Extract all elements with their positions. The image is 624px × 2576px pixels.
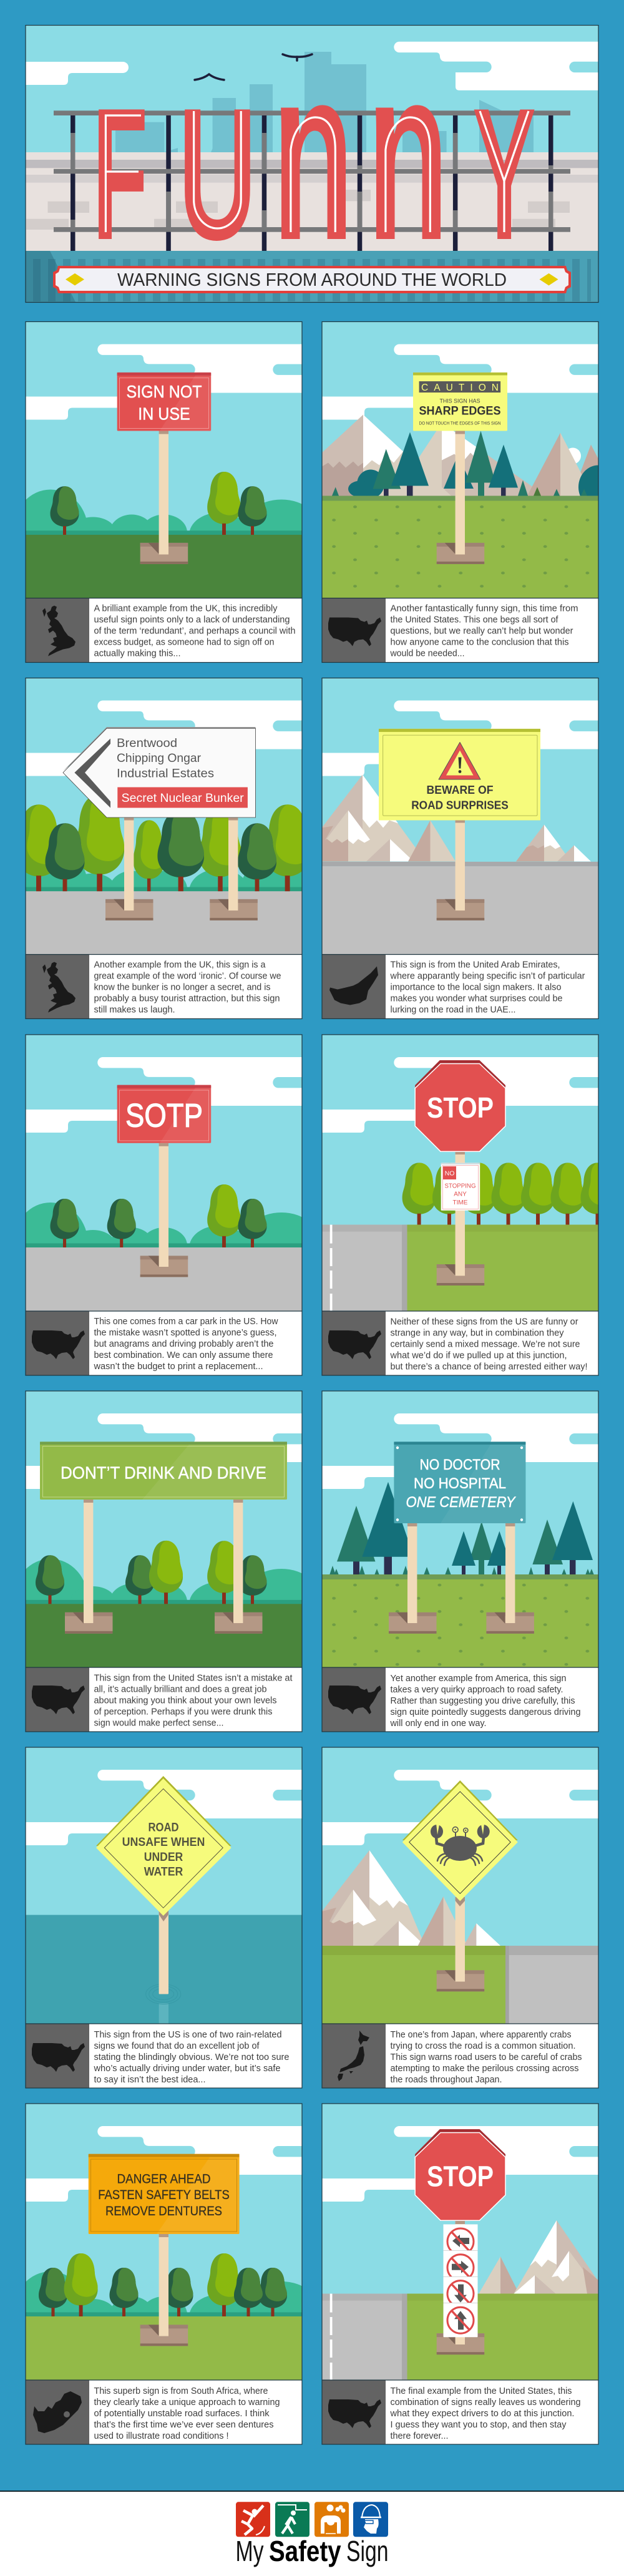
scene: [322, 2104, 599, 2381]
country box: UAE: [322, 955, 386, 1018]
caption text: what they expect drivers to do at this junction.: [389, 2409, 575, 2419]
sign: caution sharp edges: SHARP EDGES: [419, 404, 500, 418]
header frame: [26, 25, 598, 302]
header clouds: [26, 42, 598, 90]
hills: [26, 489, 302, 530]
caption text: [89, 598, 302, 663]
sign post and base: [437, 1151, 484, 1286]
caption text: would be needed...: [390, 649, 464, 659]
caption: [26, 2024, 302, 2088]
no straight ahead: [443, 2303, 478, 2338]
mountains: [296, 775, 591, 861]
header panel: [26, 14, 598, 302]
title: FUNNY neon letters: n: [272, 14, 354, 292]
caption text: probably a busy tourist attraction, but this sign: [94, 993, 280, 1003]
sign: road unsafe when under water: UNSAFE WHEN: [122, 1836, 205, 1849]
caption text: Rather than suggesting you drive carefully, this: [391, 1696, 575, 1706]
sky: [322, 678, 598, 866]
sign: caution sharp edges: THIS SIGN HAS: [439, 398, 480, 404]
country box: USA: [26, 1667, 89, 1732]
sky: [26, 1391, 302, 1667]
footer: [0, 2491, 624, 2576]
sign: SOTP: SOTP: [125, 1098, 203, 1134]
row of trees: [402, 1163, 614, 1225]
sign: no doctor: NO DOCTOR: [419, 1456, 500, 1473]
caption text: [89, 2024, 302, 2088]
subtitle banner: WARNING SIGNS FROM AROUND THE WORLD: [117, 270, 507, 290]
scene: [322, 1035, 614, 1312]
panel: danger ahead remove dentures: [13, 2104, 323, 2444]
no stopping sign: [441, 1163, 480, 1211]
caption text: [89, 955, 302, 1018]
sign: directional arrow: Industrial Estates: [117, 768, 214, 780]
sign: road unsafe when under water: WATER: [144, 1866, 183, 1879]
sky: [26, 1747, 302, 2024]
sign: danger ahead: FASTEN SAFETY BELTS: [98, 2188, 230, 2202]
sign: beware of road surprises: ROAD SURPRISES: [411, 799, 509, 811]
clouds: [26, 344, 302, 419]
stack of prohibition signs: [443, 2224, 478, 2337]
sign post: [159, 1911, 168, 1994]
country box: USA: [26, 2024, 89, 2088]
lower teal band: [26, 251, 598, 302]
caption text: about making you think about your own levels: [94, 1696, 277, 1706]
road and grass: [322, 2294, 599, 2381]
caption text: The final example from the United States, this: [391, 2386, 572, 2396]
caption text: useful sign points only to a lack of understanding: [94, 615, 290, 625]
caption text: atempting to make the perilous crossing across: [391, 2064, 579, 2074]
sign: dont't drink and drive: [40, 1442, 287, 1500]
panel: stop with no turns: [322, 2104, 599, 2444]
hills: [13, 1559, 323, 1641]
caption: [26, 1667, 302, 1732]
mountains: [322, 414, 598, 495]
icon: walking person under pipe: [275, 2502, 310, 2537]
sign post and base: [140, 1143, 188, 1277]
ground: [26, 530, 302, 598]
ground: [26, 1600, 302, 1667]
sign: directional arrow: Chipping Ongar: [117, 752, 202, 765]
road and grass: [322, 1225, 599, 1312]
sign: no doctor: ONE CEMETERY: [406, 1494, 516, 1511]
sky: [26, 1035, 302, 1311]
clouds: [26, 1413, 302, 1489]
title: FUNNY neon letters: F: [92, 70, 148, 280]
no straight down: [443, 2276, 478, 2303]
hills: [26, 869, 302, 887]
road: [26, 887, 302, 955]
hills: [13, 2271, 323, 2354]
caption text: [386, 1311, 598, 1375]
panel: road unsafe when under water: [26, 1747, 302, 2088]
sign: SIGN NOT IN USE: IN USE: [138, 404, 190, 423]
panel: secret nuclear bunker: [13, 678, 323, 1018]
clouds: [322, 1770, 598, 1845]
caption text: Another fantastically funny sign, this time from: [391, 604, 578, 614]
logo wordmark: My: [236, 2535, 263, 2567]
logo wordmark: [236, 2535, 388, 2567]
caption text: This sign from the United States isn’t a mistake at: [94, 1674, 292, 1684]
country box: USA: [322, 1667, 386, 1732]
no stopping sign: TIME: [453, 1199, 468, 1206]
sign: directional arrow: [63, 727, 256, 817]
sky: [322, 1747, 598, 2024]
logo wordmark: Safety: [269, 2535, 341, 2567]
caption text: Yet another example from America, this sign: [391, 1674, 567, 1684]
title: FUNNY neon letters: Y: [472, 68, 536, 279]
sky: [322, 322, 598, 487]
sign: no doctor: [394, 1442, 525, 1523]
sign: dont't drink and drive: DONT’T DRINK AND DRIVE: [61, 1463, 266, 1482]
sign posts and bases: [65, 1500, 262, 1634]
sign: SIGN NOT IN USE: [117, 373, 211, 431]
caption text: This sign from the US is one of two rain-related: [94, 2030, 282, 2040]
icon: slipping person: [236, 2502, 270, 2537]
scene: [322, 322, 598, 598]
road: [26, 1243, 302, 1311]
caption text: strange in any way, but in combination they: [391, 1328, 564, 1338]
no stopping sign: NO: [445, 1169, 454, 1177]
caption text: of the term ‘redundant’, and perhaps a council with: [94, 627, 296, 637]
clouds: [26, 700, 302, 776]
caption text: [386, 598, 598, 663]
panel: beware of road surprises: [296, 678, 598, 1018]
caption text: of perception. Perhaps if you were drunk this: [94, 1707, 272, 1717]
panel: stop and no stopping: [322, 1035, 614, 1375]
sign: no doctor: NO HOSPITAL: [414, 1475, 506, 1492]
scene: [26, 1747, 302, 2024]
sky: [26, 678, 302, 887]
panel: dont't drink and drive: [13, 1391, 323, 1732]
scene: [295, 1747, 598, 2024]
sign: directional arrow: Secret Nuclear Bunker: [122, 792, 244, 805]
scene: [322, 1391, 598, 1667]
stop sign: STOP: [427, 1091, 494, 1124]
sky: [26, 322, 302, 530]
trees: [36, 1541, 267, 1604]
caption text: they clearly take a unique approach to warning: [94, 2398, 280, 2408]
clouds: [26, 1770, 302, 1845]
caption text: to say it isn’t the best idea...: [94, 2075, 206, 2085]
no right turn: [443, 2250, 478, 2276]
caption text: what we’d do if we pulled up at this junction,: [389, 1350, 567, 1360]
caption: [322, 955, 598, 1018]
no stopping sign: STOPPING: [444, 1183, 476, 1189]
sign: beware of road surprises: BEWARE OF: [427, 784, 493, 796]
caption text: but anagrams and driving probably aren’t the: [94, 1339, 273, 1349]
country box: South Africa: [26, 2380, 89, 2444]
grass and road: [322, 1946, 598, 2024]
caption text: [89, 1311, 302, 1375]
scene: [13, 1391, 323, 1667]
caption: [322, 1667, 598, 1732]
birds: [195, 54, 312, 80]
no stopping sign: ANY: [454, 1191, 467, 1198]
caption text: makes you wonder what surprises could be: [391, 993, 563, 1003]
caption: [322, 1311, 598, 1375]
caption: [322, 2380, 598, 2444]
clouds: [26, 2126, 302, 2202]
caption text: takes a very quirky approach to road safety.: [391, 1685, 563, 1695]
sign post and base: [140, 431, 188, 564]
country box: USA: [26, 1311, 89, 1375]
stop sign: [415, 1060, 505, 1151]
logo wordmark: Sign: [346, 2535, 388, 2567]
scene: [26, 678, 302, 954]
caption text: signs we found that do an excellent job of: [94, 2041, 260, 2051]
caption text: [386, 2024, 598, 2088]
sign: road unsafe when under water: UNDER: [144, 1851, 183, 1864]
caption text: A brilliant example from the UK, this incredibly: [94, 604, 278, 614]
caption text: [89, 2380, 302, 2444]
clouds: [322, 1057, 598, 1133]
title: FUNNY neon letters: U: [178, 69, 256, 280]
logo: My Safety Sign: [236, 2502, 388, 2567]
caption text: still makes us laugh.: [94, 1005, 175, 1015]
caption text: Neither of these signs from the US are funny or: [391, 1317, 578, 1327]
mountains: [479, 2220, 598, 2294]
caption text: stating the blindingly obvious. We’re not too sure: [94, 2052, 290, 2062]
caption text: actually making this...: [94, 649, 181, 659]
clouds: [322, 1413, 598, 1489]
clouds: [26, 1057, 302, 1133]
caption text: the roads throughout Japan.: [391, 2075, 502, 2085]
scene: [13, 2104, 323, 2380]
sign: caution sharp edges: [413, 373, 507, 431]
caption text: the mistake wasn’t spotted is anyone’s guess,: [94, 1328, 277, 1338]
caption: [26, 955, 302, 1018]
caption text: [386, 955, 598, 1018]
caption text: [386, 2380, 598, 2444]
caption text: but there’s a chance of being arrested either way!: [391, 1362, 588, 1372]
sign post and base: [437, 2220, 484, 2354]
stop sign: [415, 2129, 505, 2220]
caption: [26, 2380, 302, 2444]
sign post and base: [437, 431, 484, 564]
country box: USA: [322, 1311, 386, 1375]
forest: [332, 431, 598, 495]
road: [322, 862, 598, 955]
title: FUNNY neon letters: [99, 105, 534, 241]
country box: Japan: [322, 2024, 386, 2088]
sign: SOTP: [117, 1085, 211, 1143]
sign: directional arrow: Brentwood: [117, 737, 177, 750]
sign posts and bases: [389, 1523, 534, 1634]
caption text: great example of the word ‘ironic’. Of course we: [94, 971, 281, 981]
panel: crab crossing: [295, 1747, 598, 2088]
caption text: lurking on the road in the UAE...: [391, 1005, 515, 1015]
sign: danger ahead: REMOVE DENTURES: [105, 2204, 222, 2218]
sky: [322, 1035, 598, 1311]
sky: [322, 1391, 598, 1667]
caption: [322, 598, 598, 663]
sign: danger ahead: [89, 2154, 240, 2234]
city skyline: [115, 52, 534, 152]
caption text: where apparantly being specific isn’t of particular: [390, 971, 585, 981]
wall: [26, 152, 598, 251]
caption text: wasn’t the budget to print a replacement...: [93, 1362, 263, 1372]
stop sign: STOP: [427, 2160, 494, 2193]
sign: caution sharp edges: DO NOT TOUCH THE EDGES OF THIS SIGN: [419, 422, 500, 426]
title: FUNNY neon letters: n: [367, 14, 449, 292]
panel: SOTP: [13, 1035, 323, 1375]
scene: [26, 322, 302, 598]
caption text: importance to the local sign makers. It also: [391, 982, 562, 992]
caption text: combination of signs really leaves us wondering: [391, 2398, 580, 2408]
caption text: all, it’s actually brilliant and does a great job: [94, 1685, 267, 1695]
trees: [39, 2253, 287, 2316]
sign post and base: [140, 2234, 188, 2346]
caption: [322, 2024, 598, 2088]
caption text: used to illustrate road conditions !: [94, 2431, 228, 2441]
sky: [322, 2104, 598, 2380]
caption: [26, 598, 302, 663]
scaffold: [54, 110, 570, 251]
caption text: This sign is from the United Arab Emirates,: [391, 960, 560, 970]
caption text: will only end in one way.: [390, 1719, 486, 1729]
sign: crab: [402, 1780, 518, 1901]
caption text: questions, but we really can’t help but wonder: [391, 627, 573, 637]
caption text: trying to cross the road is a common situation.: [391, 2041, 575, 2051]
forest: [329, 1482, 594, 1575]
caption text: who’s actually driving under water, but it’s safe: [93, 2064, 280, 2074]
caption text: sign quite pointedly suggests dangerous driving: [391, 1707, 580, 1717]
trees: [50, 472, 267, 535]
clouds: [322, 700, 598, 776]
hills: [13, 1203, 323, 1285]
sign: road unsafe when under water: ROAD: [149, 1821, 178, 1835]
clouds: [322, 2126, 598, 2202]
caption text: of potentially unstable road surfaces. I think: [94, 2409, 270, 2419]
sign: beware of road surprises: [379, 729, 540, 820]
mountains: [295, 1850, 500, 1946]
subtitle banner: [53, 266, 571, 293]
caption text: Another example from the UK, this sign is a: [94, 960, 266, 970]
sign: SIGN NOT IN USE: SIGN NOT: [126, 382, 202, 401]
caption text: This one comes from a car park in the US. How: [94, 1317, 278, 1327]
panel: no doctor no hospital one cemetery: [322, 1391, 598, 1732]
ground: [322, 1574, 598, 1667]
caption text: I guess they want you to stop, and then stay: [391, 2420, 567, 2430]
sign: danger ahead: DANGER AHEAD: [117, 2172, 211, 2187]
no left turn: [443, 2224, 478, 2250]
caption text: excess budget, as someone had to sign off on: [94, 638, 275, 648]
clouds: [322, 344, 598, 419]
caption text: the United States. This one begs all sort of: [391, 615, 558, 625]
trees: [50, 1184, 267, 1247]
caption text: [89, 1667, 302, 1732]
caption text: [386, 1667, 598, 1732]
caption text: there forever...: [391, 2431, 448, 2441]
icon: head with hard hat and goggles: [353, 2502, 388, 2537]
icon: lungs and fumes: [314, 2502, 349, 2537]
caption text: that’s the first time we’ve ever seen dentures: [94, 2420, 273, 2430]
sign: road unsafe when under water: [96, 1776, 232, 1916]
country box: USA: [322, 2380, 386, 2444]
icon: crab: [431, 1823, 490, 1865]
panel: sharp edges: [321, 321, 599, 663]
caption text: know the bunker is no longer a secret, and is: [94, 982, 271, 992]
sign post and base: [437, 1897, 484, 1991]
panel: sign not in use: [13, 322, 323, 663]
sign post and base: [437, 820, 484, 920]
ground: [322, 495, 598, 598]
caption text: how anyone came to the conclusion that this: [391, 638, 569, 648]
water: [26, 1915, 302, 2024]
country box: UK: [26, 955, 89, 1018]
sign: caution sharp edges: CAUTION: [421, 383, 499, 393]
caption: [26, 1311, 302, 1375]
sign posts and bases: [105, 817, 258, 920]
sky: [26, 2104, 302, 2380]
country box: USA: [322, 598, 386, 663]
header sky: [26, 25, 598, 152]
caption text: This superb sign is from South Africa, where: [94, 2386, 268, 2396]
caption text: best combination. We can only assume there: [94, 1350, 273, 1360]
scene: [296, 678, 598, 955]
caption text: certainly send a mixed message. We’re not sure: [391, 1339, 580, 1349]
caption text: This sign warns road users to be careful of crabs: [391, 2052, 582, 2062]
caption text: The one’s from Japan, where apparently crabs: [391, 2030, 572, 2040]
country box: UK: [26, 598, 89, 663]
scene: [13, 1035, 323, 1311]
ground: [26, 2312, 302, 2380]
caption text: sign would make perfect sense...: [94, 1719, 223, 1729]
trees: [26, 799, 302, 891]
